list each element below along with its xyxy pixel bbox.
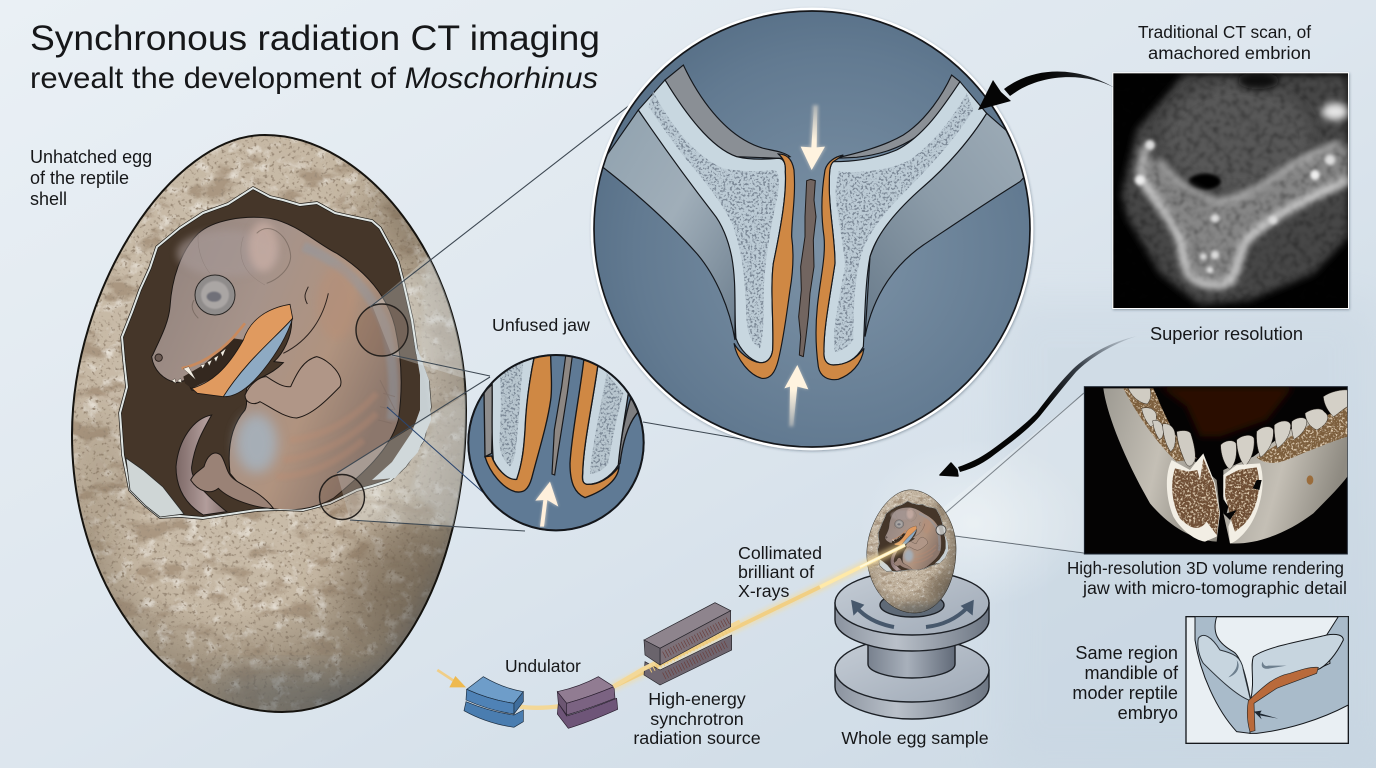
broken shell opening bbox=[120, 188, 430, 518]
arrow: CT to zoom circle bbox=[978, 72, 1115, 110]
right jaw bbox=[1223, 413, 1347, 543]
rotation arrows bbox=[852, 601, 973, 627]
glowing arrows bbox=[784, 105, 826, 427]
central suture bbox=[799, 179, 816, 357]
orange mouth lining bbox=[182, 304, 293, 397]
label: modern reptile region: mandible of bbox=[1084, 663, 1179, 683]
label: unfused jaw: Unfused jaw bbox=[492, 315, 590, 335]
right cross-section bbox=[1223, 463, 1263, 543]
label: collimated x-rays bbox=[738, 543, 822, 601]
label: modern reptile region bbox=[1072, 643, 1179, 723]
nostril bbox=[155, 354, 162, 361]
label: traditional CT bbox=[1138, 22, 1311, 63]
tail bbox=[176, 415, 227, 515]
blue magnet bbox=[464, 677, 523, 727]
selection spot on small egg bbox=[936, 525, 946, 535]
synchrotron source group bbox=[437, 603, 740, 728]
label: synchrotron source: synchrotron bbox=[650, 709, 744, 729]
panel: modern reptile mandible diagram bbox=[1186, 617, 1348, 743]
X-ray beam bbox=[613, 545, 905, 687]
zoom connector lines bbox=[337, 87, 747, 531]
label: 3D rendering caption: High-resolution 3D volume rendering bbox=[1067, 558, 1344, 578]
label: modern reptile region: moder reptile bbox=[1072, 683, 1178, 703]
rotating sample stage bbox=[835, 571, 989, 719]
body and head bbox=[152, 217, 401, 510]
small egg on rotating stage group bbox=[835, 490, 989, 719]
panel: large egg with embryo bbox=[72, 135, 466, 715]
label: egg shell: shell bbox=[30, 189, 67, 209]
title bbox=[30, 18, 600, 95]
embryo bbox=[152, 217, 401, 515]
left jaw bbox=[1103, 388, 1220, 542]
panel: traditional CT scan image bbox=[1112, 72, 1349, 309]
teeth bbox=[172, 348, 226, 383]
connector lines from small egg to rendering bbox=[940, 393, 1084, 553]
small whole egg bbox=[867, 490, 956, 614]
blue lower jaw bbox=[223, 318, 293, 397]
arrow: superior resolution bbox=[940, 336, 1137, 476]
shell fragments bbox=[126, 340, 431, 517]
glowing arrow bbox=[535, 482, 558, 527]
leg and foot bbox=[191, 453, 273, 508]
insertion device array bbox=[613, 603, 740, 687]
beam between magnets bbox=[520, 706, 562, 708]
left cross-section bbox=[1167, 453, 1220, 542]
label: egg shell bbox=[30, 147, 152, 209]
purple magnet bbox=[557, 677, 618, 728]
label: modern reptile region: Same region bbox=[1075, 643, 1178, 663]
title: Synchronous radiation CT imaging bbox=[30, 18, 600, 58]
incoming electron arrow bbox=[437, 670, 466, 687]
mouth interior bbox=[183, 338, 245, 388]
left bone bbox=[638, 80, 786, 363]
label: traditional CT: Traditional CT scan, of bbox=[1138, 22, 1311, 42]
panel: 3D volume rendering of jaw bbox=[1084, 387, 1347, 554]
right orange periosteum bbox=[816, 155, 864, 380]
right bone bbox=[824, 82, 987, 365]
left orange periosteum bbox=[734, 154, 795, 378]
right teeth bbox=[1221, 390, 1347, 469]
arm bbox=[245, 357, 341, 418]
label: synchrotron source bbox=[633, 689, 761, 748]
label: collimated x-rays: brilliant of bbox=[738, 562, 814, 582]
egg shell bbox=[72, 135, 466, 715]
label: collimated x-rays: Collimated bbox=[738, 543, 822, 563]
right soft tissue bbox=[865, 113, 1040, 337]
label: superior resolution: Superior resolution bbox=[1150, 324, 1303, 344]
label: traditional CT: amachored embrion bbox=[1148, 43, 1311, 63]
central suture bbox=[552, 353, 573, 475]
label: synchrotron source: radiation source bbox=[633, 728, 761, 748]
label: synchrotron source: High-energy bbox=[648, 689, 746, 709]
right jaw bbox=[570, 358, 640, 498]
body shading bbox=[177, 222, 395, 477]
left soft tissue bbox=[600, 110, 735, 340]
label: egg shell: of the reptile bbox=[30, 168, 129, 188]
label: 3D rendering caption bbox=[1067, 558, 1347, 598]
label: whole egg sample: Whole egg sample bbox=[841, 728, 989, 748]
left teeth bbox=[1128, 388, 1195, 466]
label: 3D rendering caption: jaw with micro-tomographic detail bbox=[1082, 578, 1347, 598]
label: collimated x-rays: X-rays bbox=[738, 581, 789, 601]
eye bbox=[195, 275, 235, 315]
panel: large magnified jaw circle bbox=[591, 8, 1040, 450]
title: revealt the development of Moschorhinus bbox=[30, 62, 598, 95]
label: undulator: Undulator bbox=[505, 656, 581, 676]
label: modern reptile region: embryo bbox=[1118, 703, 1178, 723]
panel: small magnified jaw circle bbox=[467, 353, 645, 531]
left jaw bbox=[484, 353, 552, 492]
magnified selection overlays bbox=[318, 252, 466, 529]
label: egg shell: Unhatched egg bbox=[30, 147, 152, 167]
